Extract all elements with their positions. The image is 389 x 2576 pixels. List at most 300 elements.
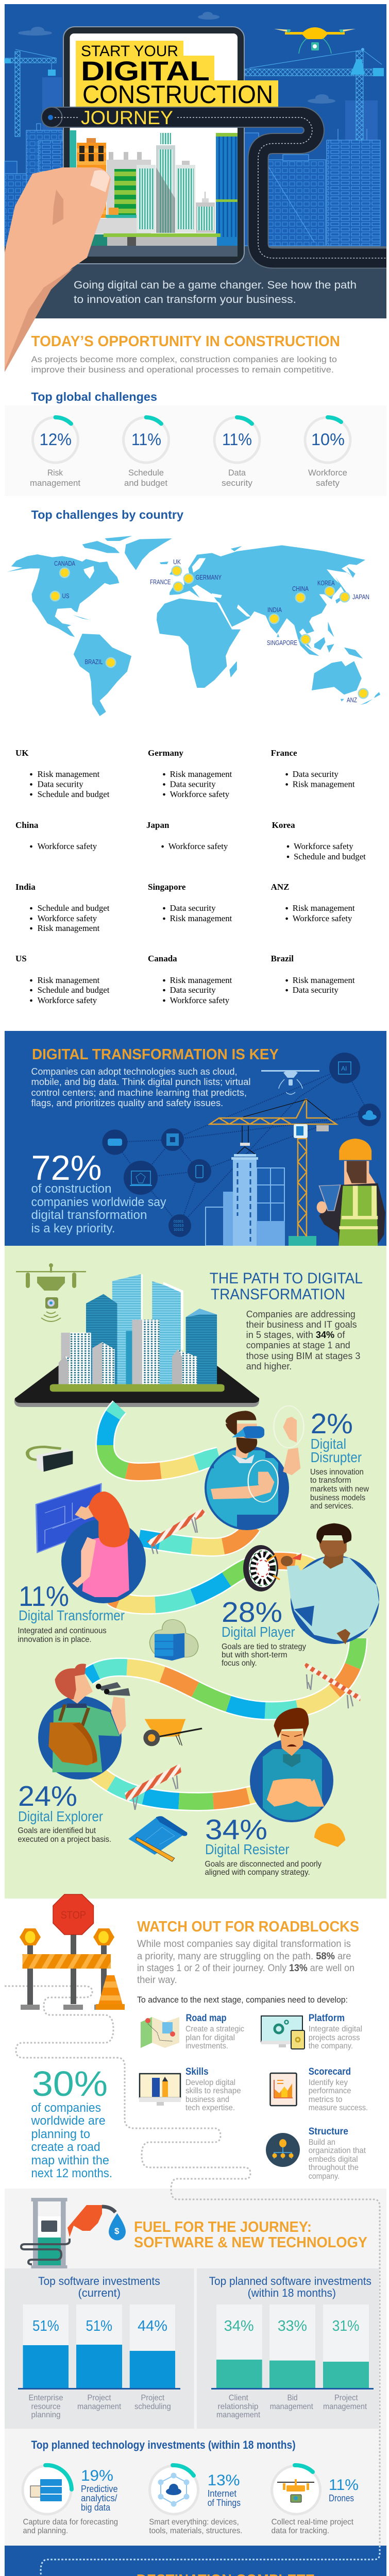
stat: 30%: of companies bbox=[31, 2101, 101, 2115]
heading: DIGITAL TRANSFORMATION IS KEY bbox=[32, 1046, 279, 1063]
hero subtitle bbox=[74, 279, 357, 306]
item: platform: the company. bbox=[309, 2042, 353, 2050]
ring: schedule and budget 11%: Schedule bbox=[128, 468, 164, 478]
list: Singapore: Risk management bbox=[170, 913, 232, 923]
barrier bbox=[147, 1509, 206, 1554]
list: Singapore: Data security bbox=[170, 903, 216, 913]
list: Brazil: Brazil bbox=[271, 954, 294, 963]
list: China bbox=[15, 820, 97, 851]
worker bbox=[317, 1139, 385, 1246]
list: Germany bbox=[148, 748, 232, 799]
item: road map: Create a strategic bbox=[185, 2025, 244, 2033]
bar chart: planned software investments: Client bbox=[229, 2394, 248, 2402]
stage text: 11% transformer: innovation is in place. bbox=[18, 1635, 92, 1644]
heading: TODAY’S OPPORTUNITY IN CONSTRUCTION bbox=[31, 333, 340, 350]
list: Japan: Japan bbox=[146, 820, 170, 830]
bar chart: current software investments: (current) bbox=[78, 2286, 121, 2299]
tech item: predictive analytics 19%: Capture data for forecasting bbox=[23, 2518, 118, 2527]
body text: and higher. bbox=[246, 1361, 292, 1371]
list: UK: UK bbox=[15, 748, 29, 758]
list: India: India bbox=[15, 882, 36, 892]
ring: risk management 12%: Risk bbox=[47, 468, 63, 478]
bar chart: current software investments: planning bbox=[31, 2411, 61, 2419]
list: France bbox=[271, 748, 355, 789]
tech item: predictive analytics 19%: 19% bbox=[81, 2467, 113, 2484]
icon: orange drone bbox=[277, 2479, 314, 2502]
list: US bbox=[15, 954, 110, 1005]
intro text bbox=[31, 354, 337, 375]
ring: workforce safety 10% bbox=[305, 417, 350, 488]
bar chart: current software investments: Top software investments bbox=[38, 2275, 160, 2287]
icon: binary: 01001 bbox=[174, 1220, 184, 1224]
ring: risk management 12%: management bbox=[30, 478, 80, 488]
bar chart: current software investments bbox=[5, 2268, 194, 2429]
stat: 30%: planning to bbox=[31, 2127, 90, 2141]
stage text: 34% resister: 34% bbox=[205, 1814, 267, 1845]
roadblock illustration: STOP bbox=[61, 1909, 86, 1921]
item: platform: Integrate digital bbox=[309, 2025, 362, 2033]
list: Singapore: Singapore bbox=[148, 882, 186, 892]
tech item: predictive analytics 19%: Predictive bbox=[81, 2484, 117, 2494]
bar chart: current software investments: resource bbox=[31, 2402, 61, 2411]
ground bbox=[5, 246, 386, 318]
stage text: 34% resister: aligned with company strategy. bbox=[205, 1868, 310, 1877]
ring: schedule and budget 11%: 11% bbox=[131, 430, 161, 449]
stat: 30%: map within the bbox=[31, 2154, 109, 2167]
item: skills: tech expertise. bbox=[185, 2104, 235, 2112]
icon: hard hat bbox=[314, 1823, 345, 1847]
tech item: internet of things 13%: Smart everything: devices, bbox=[149, 2518, 239, 2527]
heading: FUEL FOR THE JOURNEY: bbox=[134, 2219, 312, 2235]
stat: 30%: next 12 months. bbox=[31, 2166, 112, 2180]
road bbox=[48, 107, 386, 258]
path: tablet to disrupter bbox=[105, 1407, 219, 1472]
ring: data security 11%: Data bbox=[228, 468, 246, 478]
ring: workforce safety 10%: 10% bbox=[311, 430, 345, 449]
map labels: INDIA bbox=[267, 606, 282, 614]
panel: today's opportunity bbox=[5, 333, 386, 1005]
tablet bbox=[63, 27, 244, 264]
list: Canada bbox=[148, 954, 232, 1005]
crane bbox=[210, 1099, 336, 1246]
map labels: FRANCE bbox=[150, 578, 171, 586]
heading: SOFTWARE & NEW TECHNOLOGY bbox=[134, 2234, 367, 2251]
ring: data security 11% bbox=[214, 417, 260, 488]
panel: fuel for the journey bbox=[5, 2198, 379, 2535]
item: road map: plan for digital bbox=[185, 2033, 235, 2042]
stage text: 2% disrupter: Digital bbox=[311, 1436, 346, 1452]
list: Korea: Schedule and budget bbox=[294, 852, 366, 861]
building under construction bbox=[206, 1157, 285, 1246]
tech item: internet of things 13% bbox=[149, 2465, 242, 2535]
character: digital disrupter bbox=[205, 1406, 304, 1530]
item: structure: throughout the bbox=[309, 2163, 359, 2172]
list: Canada: Workforce safety bbox=[170, 995, 230, 1005]
icon: fuel pump: $ bbox=[114, 2226, 120, 2236]
list: Brazil: Data security bbox=[293, 985, 339, 995]
stat: 30%: worldwide are bbox=[31, 2114, 106, 2128]
list: UK: Schedule and budget bbox=[38, 789, 110, 799]
icon: dart board bbox=[243, 1545, 280, 1591]
character: digital resister bbox=[250, 1708, 333, 1824]
dotted journey line, blue bbox=[41, 2546, 380, 2576]
list: Brazil: Risk management bbox=[293, 975, 355, 985]
icon: green drone bbox=[16, 1263, 86, 1321]
heading bbox=[210, 1270, 363, 1303]
icon: map bbox=[141, 2017, 179, 2048]
list: Korea: Korea bbox=[272, 820, 295, 830]
hero subtitle: to innovation can transform your business. bbox=[74, 294, 296, 306]
stage text: 24% explorer bbox=[18, 1780, 111, 1844]
network lines bbox=[115, 1068, 369, 1226]
list: France: Data security bbox=[293, 769, 339, 779]
icon: binary: 10101 bbox=[174, 1228, 184, 1232]
stage text: 2% disrupter: Uses innovation bbox=[310, 1468, 364, 1477]
icon: VR headset bbox=[27, 1447, 73, 1472]
heading: TRANSFORMATION bbox=[211, 1286, 345, 1303]
icon: blueprint and level bbox=[128, 1816, 187, 1861]
item: structure: organization that bbox=[309, 2146, 366, 2155]
list: Canada: Canada bbox=[148, 954, 177, 963]
tech item: predictive analytics 19%: big data bbox=[81, 2502, 111, 2513]
tech item: drones 11% bbox=[272, 2465, 359, 2535]
item: skills: business and bbox=[185, 2095, 229, 2104]
item: skills: Develop digital bbox=[185, 2078, 235, 2087]
ring: risk management 12%: 12% bbox=[39, 430, 72, 449]
bar chart: planned software investments: Bid bbox=[287, 2394, 298, 2402]
stat: 30% bbox=[31, 2064, 112, 2180]
left crane bbox=[5, 49, 57, 137]
path: explorer to resister bbox=[88, 1765, 263, 1802]
item: scorecard: Scorecard bbox=[309, 2066, 351, 2077]
stage text: 24% explorer: 24% bbox=[18, 1780, 77, 1812]
item: road map: investments. bbox=[185, 2042, 228, 2050]
ring: data security 11%: security bbox=[222, 478, 253, 488]
item: scorecard: metrics to bbox=[309, 2095, 343, 2104]
panel: digital transformation is key bbox=[5, 1031, 386, 1246]
stat: 72%: of construction bbox=[31, 1182, 111, 1196]
list: ANZ: Risk management bbox=[293, 903, 355, 913]
panel: destination background bbox=[5, 2546, 386, 2576]
list: Canada: Data security bbox=[170, 985, 216, 995]
tech item: predictive analytics 19% bbox=[23, 2465, 118, 2535]
icon: binary bbox=[168, 1214, 191, 1237]
heading: top global challenges: Top global challenges bbox=[31, 390, 157, 403]
body text: flags, and prioritizes quality and safety issues. bbox=[31, 1098, 223, 1108]
bar chart: current software investments: management bbox=[77, 2402, 122, 2411]
bar chart: planned software investments: management bbox=[270, 2402, 313, 2411]
item: structure bbox=[266, 2126, 366, 2181]
stage text: 28% player: 28% bbox=[222, 1596, 282, 1628]
path: disrupter to transformer bbox=[139, 1526, 252, 1547]
stage text: 2% disrupter: and services. bbox=[310, 1502, 353, 1511]
ring: schedule and budget 11% bbox=[124, 417, 169, 488]
list: China: China bbox=[15, 820, 39, 830]
bar chart: current software investments: scheduling bbox=[134, 2402, 171, 2411]
body text bbox=[137, 1939, 354, 1986]
chart: global challenge rings bbox=[5, 405, 386, 496]
ring: risk management 12% bbox=[30, 417, 80, 488]
city on tablet screen bbox=[70, 130, 238, 257]
stat: 30%: create a road bbox=[31, 2140, 100, 2154]
hero subtitle: Going digital can be a game changer. See how the path bbox=[74, 279, 357, 291]
barrier bbox=[125, 1764, 181, 1810]
blueprint board bbox=[36, 1484, 101, 1552]
bar chart: planned software investments: Top planned software investments bbox=[209, 2275, 371, 2287]
list: France: Risk management bbox=[293, 779, 355, 789]
stage text: 11% transformer: Digital Transformer bbox=[19, 1607, 125, 1623]
list: ANZ: Workforce safety bbox=[293, 913, 352, 923]
title blocks: DIGITAL bbox=[81, 56, 210, 87]
intro text: improve their business and operational processes to remain competitive. bbox=[31, 365, 334, 375]
path: player to explorer bbox=[88, 1638, 358, 1710]
map labels: ANZ bbox=[347, 696, 357, 704]
stage text: 28% player: Goals are tied to strategy bbox=[222, 1642, 306, 1651]
icon: binary: 01010 bbox=[174, 1224, 184, 1228]
list: UK: Risk management bbox=[38, 769, 100, 779]
icon: IoT cloud bbox=[158, 2473, 190, 2507]
body text bbox=[31, 1066, 251, 1108]
heading: by country: Top challenges by country bbox=[31, 508, 183, 521]
item: structure: embeds digital bbox=[309, 2155, 358, 2164]
ring: workforce safety 10%: Workforce bbox=[308, 468, 347, 478]
icon: yellow drone bbox=[274, 27, 356, 54]
panel: roadblocks bbox=[20, 1894, 368, 2181]
path: transformer to player bbox=[112, 1561, 312, 1605]
item: structure: company. bbox=[309, 2172, 340, 2181]
right crane bbox=[245, 48, 384, 140]
character: digital explorer bbox=[38, 1664, 130, 1780]
list: India bbox=[15, 882, 110, 933]
list: Germany: Germany bbox=[148, 748, 183, 758]
body text: a priority, many are struggling on the path. 58% are bbox=[137, 1951, 351, 1962]
list: India: Risk management bbox=[38, 923, 100, 933]
bar chart: current software investments: 51% bbox=[32, 2318, 59, 2334]
list: US: Risk management bbox=[38, 975, 100, 985]
item: scorecard: performance bbox=[309, 2087, 351, 2095]
icon: org chart bbox=[266, 2133, 300, 2167]
item: platform: projects across bbox=[309, 2033, 360, 2042]
ring: data security 11%: 11% bbox=[222, 430, 252, 449]
list: Japan: Workforce safety bbox=[168, 841, 228, 851]
list: Korea: Workforce safety bbox=[294, 841, 353, 851]
country lists bbox=[15, 748, 366, 1005]
world map bbox=[7, 536, 380, 716]
stage text: 2% disrupter: 2% bbox=[311, 1408, 353, 1439]
dotted journey line, grey bbox=[5, 1986, 380, 2546]
stage text: 34% resister: Digital Resister bbox=[205, 1841, 290, 1857]
map labels: CANADA bbox=[54, 560, 75, 567]
winding game-board path bbox=[88, 1407, 358, 1802]
list: UK bbox=[15, 748, 110, 799]
list: ANZ: ANZ bbox=[271, 882, 290, 892]
blueprint city and cranes bbox=[5, 77, 380, 246]
map labels: JAPAN bbox=[352, 593, 369, 601]
ring: workforce safety 10%: safety bbox=[316, 478, 340, 488]
list: India: Schedule and budget bbox=[38, 903, 110, 913]
list: Brazil bbox=[271, 954, 355, 995]
map labels: US bbox=[62, 592, 70, 600]
tech item: internet of things 13%: of Things bbox=[208, 2498, 241, 2508]
list: US: US bbox=[15, 954, 27, 963]
bar chart: planned software investments: (within 18 months) bbox=[248, 2286, 336, 2299]
bar chart: planned software investments: management bbox=[216, 2411, 261, 2419]
map labels: UK bbox=[173, 558, 181, 566]
lead-in: To advance to the next stage, companies need to develop: bbox=[137, 1995, 348, 2005]
stat: 72% bbox=[31, 1148, 166, 1235]
stat: 72%: digital transformation bbox=[31, 1208, 147, 1222]
stage text: 24% explorer: executed on a project basis. bbox=[18, 1835, 111, 1844]
body text: companies at stage 1 and bbox=[246, 1340, 350, 1350]
icon: AI chip: AI bbox=[341, 1065, 347, 1072]
bar chart: current software investments: 51% bbox=[86, 2318, 112, 2334]
list: China: Workforce safety bbox=[38, 841, 97, 851]
list: Germany: Data security bbox=[170, 779, 216, 789]
stat: 72%: 72% bbox=[31, 1148, 102, 1188]
icon: cloud server bbox=[149, 1619, 198, 1660]
icon: laptop bbox=[124, 1161, 158, 1195]
tech item: predictive analytics 19%: and planning. bbox=[23, 2527, 68, 2535]
bar chart: current software investments: Project bbox=[141, 2394, 165, 2402]
map labels bbox=[54, 558, 369, 704]
stage text: 2% disrupter: business models bbox=[310, 1494, 365, 1502]
ring: schedule and budget 11%: and budget bbox=[124, 478, 167, 488]
list: France: France bbox=[271, 748, 297, 758]
body text: in 5 stages, with 34% of bbox=[246, 1330, 345, 1340]
stage text: 34% resister bbox=[205, 1814, 322, 1877]
tech item: drones 11%: data for tracking. bbox=[272, 2527, 329, 2535]
stage text: 28% player bbox=[222, 1596, 306, 1668]
icon: light drone bbox=[261, 1070, 319, 1094]
heading: WATCH OUT FOR ROADBLOCKS bbox=[137, 1919, 359, 1935]
bar chart: planned software investments: Project bbox=[334, 2394, 358, 2402]
list: UK: Data security bbox=[38, 779, 83, 789]
stage text: 24% explorer: Goals are identified but bbox=[18, 1826, 96, 1835]
list: Japan bbox=[146, 820, 228, 851]
map labels: GERMANY bbox=[196, 573, 222, 581]
heading: planned technology: Top planned technology investments (within 18 months) bbox=[31, 2438, 296, 2451]
list: India: Workforce safety bbox=[38, 913, 97, 923]
hand bbox=[5, 167, 111, 372]
tech item: internet of things 13%: 13% bbox=[208, 2472, 240, 2489]
stage text: 2% disrupter: Disrupter bbox=[311, 1449, 362, 1465]
intro text: As projects become more complex, construction companies are looking to bbox=[31, 354, 337, 364]
icon: tablet with chart bbox=[270, 2073, 297, 2106]
map labels: CHINA bbox=[292, 585, 309, 592]
bar chart: planned software investments bbox=[197, 2268, 379, 2429]
stage text: 34% resister: Goals are disconnected and poorly bbox=[205, 1860, 322, 1869]
tech item: internet of things 13%: tools, materials, structures. bbox=[149, 2527, 242, 2535]
tech item: internet of things 13%: Internet bbox=[208, 2488, 236, 2499]
panel: hero bbox=[5, 4, 386, 372]
item: scorecard: measure success. bbox=[309, 2104, 368, 2112]
list: ANZ bbox=[271, 882, 355, 923]
bar chart: current software investments: 44% bbox=[138, 2318, 167, 2334]
stage text: 28% player: but with short-term bbox=[222, 1651, 287, 1659]
body text: in stages 1 or 2 of their journey. Only 13% are well on bbox=[137, 1963, 354, 1974]
stage text: 11% transformer: Integrated and continuous bbox=[18, 1626, 107, 1635]
bar chart: current software investments: Enterprise bbox=[29, 2394, 63, 2402]
list: Germany: Workforce safety bbox=[170, 789, 230, 799]
bar chart: current software investments: Project bbox=[88, 2394, 111, 2402]
item: road map: Road map bbox=[186, 2013, 227, 2024]
item: road map bbox=[141, 2013, 244, 2050]
stage text: 28% player: focus only. bbox=[222, 1659, 257, 1668]
stat: 72%: companies worldwide say bbox=[31, 1195, 166, 1209]
icon: server bbox=[30, 2479, 62, 2501]
stage text: 24% explorer: Digital Explorer bbox=[18, 1808, 103, 1824]
tablet with city bbox=[14, 1274, 259, 1407]
item: structure: Build an bbox=[309, 2138, 335, 2147]
map labels: KOREA bbox=[317, 579, 335, 587]
stage text: 2% disrupter: markets with new bbox=[310, 1485, 369, 1494]
title blocks bbox=[76, 41, 278, 109]
body text: mobile, and big data. Think digital punch lists; virtual bbox=[31, 1077, 251, 1087]
body text: control centers; and machine learning that predicts, bbox=[31, 1088, 247, 1098]
stage text: 28% player: Digital Player bbox=[222, 1624, 295, 1640]
heading: THE PATH TO DIGITAL bbox=[210, 1270, 363, 1287]
stat: 30%: 30% bbox=[32, 2064, 108, 2104]
stat: 72%: is a key priority. bbox=[31, 1222, 115, 1235]
stage text: 2% disrupter: to transform bbox=[310, 1476, 351, 1485]
item: platform bbox=[261, 2013, 362, 2050]
stage text: 11% transformer bbox=[18, 1580, 125, 1644]
list: Korea bbox=[272, 820, 366, 861]
roadblock illustration bbox=[20, 1894, 125, 2010]
tech item: drones 11%: Collect real-time project bbox=[272, 2518, 354, 2527]
stage text: 11% transformer: 11% bbox=[19, 1580, 69, 1612]
body text: their way. bbox=[137, 1975, 177, 1986]
icon: monitor and phone bbox=[261, 2016, 305, 2049]
bar chart: planned software investments: relationship bbox=[217, 2402, 259, 2411]
icon: monitor with ruler and pencil bbox=[139, 2074, 181, 2106]
item: structure: Structure bbox=[309, 2126, 348, 2137]
tech item: drones 11%: 11% bbox=[329, 2477, 359, 2494]
icon: wheelbarrow bbox=[143, 1719, 202, 1746]
item: skills bbox=[139, 2066, 241, 2112]
icon: AI chip bbox=[329, 1053, 360, 1083]
road: JOURNEY bbox=[81, 107, 173, 128]
title blocks: CONSTRUCTION bbox=[82, 81, 273, 109]
stage text: 2% disrupter bbox=[310, 1408, 369, 1511]
character: digital transformer bbox=[36, 1484, 146, 1603]
body text: their business and IT goals bbox=[246, 1319, 357, 1330]
clouds bbox=[18, 12, 335, 104]
body text: Companies are addressing bbox=[246, 1309, 356, 1319]
tech item: predictive analytics 19%: analytics/ bbox=[81, 2493, 117, 2503]
item: scorecard bbox=[270, 2066, 368, 2112]
icon: phone bbox=[188, 1159, 211, 1183]
bar chart: planned software investments: 34% bbox=[224, 2318, 254, 2334]
bar chart: planned software investments: management bbox=[323, 2402, 367, 2411]
item: skills: skills to reshape bbox=[185, 2087, 241, 2095]
list: Singapore bbox=[148, 882, 232, 923]
icon: cloud bbox=[358, 1104, 381, 1126]
map labels: SINGAPORE bbox=[267, 639, 297, 647]
body text: those using BIM at stages 3 bbox=[246, 1351, 360, 1361]
map labels: BRAZIL bbox=[84, 658, 103, 666]
barrier bbox=[304, 1663, 361, 1708]
tech item: drones 11%: Drones bbox=[329, 2493, 354, 2503]
icon: fuel pump bbox=[21, 2198, 126, 2268]
character: digital player bbox=[281, 1523, 379, 1645]
list: Germany: Risk management bbox=[170, 769, 232, 779]
item: platform: Platform bbox=[309, 2013, 345, 2024]
bar chart: planned software investments: 33% bbox=[278, 2318, 307, 2334]
panel: path to digital transformation bbox=[5, 1246, 386, 1899]
list: Canada: Risk management bbox=[170, 975, 232, 985]
list: US: Workforce safety bbox=[38, 995, 97, 1005]
